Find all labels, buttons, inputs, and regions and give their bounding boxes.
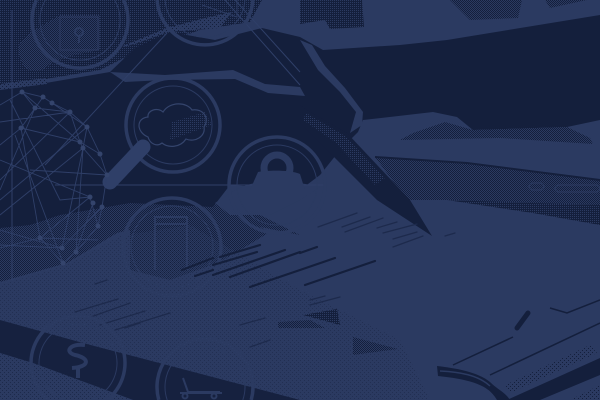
hand shadow on tablet [400, 122, 593, 144]
tablet on the desk [375, 157, 600, 225]
mid shadow around phone circle [130, 205, 270, 280]
highlight: thumb on document [215, 181, 320, 215]
tablet buttons [529, 183, 600, 192]
icon: pen holder capsule [110, 147, 143, 182]
icon: large padlock circle [229, 137, 325, 233]
hand silhouette [0, 15, 600, 228]
lower left document shadow around globe [0, 195, 300, 282]
upper left lighter patch [18, 15, 100, 71]
icon: top circle [157, 0, 253, 45]
highlight: lit back of hand near cloud [170, 112, 212, 140]
icon: padlock circle [32, 0, 128, 68]
triangle charts on document [278, 309, 398, 355]
globe network [0, 90, 110, 266]
highlight: little finger edge [300, 40, 363, 133]
highlight: knuckle band [118, 12, 232, 48]
upper centre dark patch [300, 0, 364, 29]
highlight: finger band [110, 70, 305, 96]
document speckle texture [0, 225, 430, 400]
icon: phone circle [123, 198, 221, 296]
document text lines [75, 213, 455, 347]
highlight: wrist band [0, 78, 47, 90]
connection frame lines [12, 0, 325, 280]
icon: cloud circle [126, 78, 220, 172]
upper left shaded backdrop [0, 0, 262, 85]
clipboard binder [437, 300, 600, 400]
upper right shaded patches [450, 0, 587, 20]
dark table strip below document [0, 320, 300, 400]
icon: shopping cart circle [157, 339, 253, 400]
lower left table speckle [0, 353, 133, 400]
icon: dollar circle [31, 316, 125, 400]
pen [300, 105, 432, 236]
